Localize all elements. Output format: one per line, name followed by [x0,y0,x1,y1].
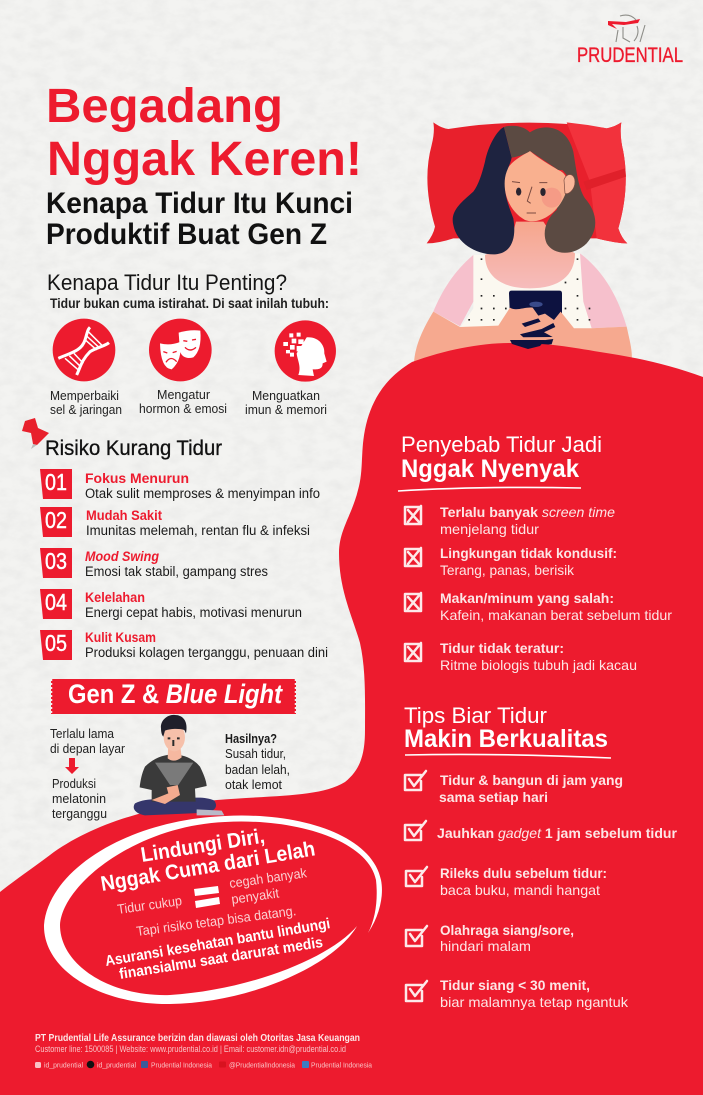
face [504,151,567,221]
hair fringe [504,126,576,170]
icon captions: sel & jaringan [50,403,122,417]
text: hasilnya: badan lelah, [225,763,290,777]
risk 04: Energi cepat habis, motivasi menurun [85,605,302,620]
heading: Risiko Kurang Tidur [45,437,222,460]
callout body: Asuransi kesehatan bantu lindungi [104,915,331,970]
icon: theatre masks [149,319,212,381]
icon captions: hormon & emosi [139,402,227,416]
phone [509,291,562,348]
tip 1: Tidur & bangun di jam yang [440,772,623,788]
icon captions: imun & memori [245,403,327,417]
risk 03: Mood Swing [85,548,159,564]
icon captions [50,388,327,417]
text: cause of melatonin disruption: Terlalu lama [50,727,114,741]
tip 4 [406,922,574,954]
cause 4: Ritme biologis tubuh jadi kacau [440,657,637,673]
text: cause of melatonin disruption: melatonin [52,792,106,806]
callout heading: Nggak Cuma dari Lelah [99,837,317,896]
footer: PT Prudential Life Assurance berizin dan diawasi oleh Otoritas Jasa Keuangan [35,1032,360,1044]
intro text: Tidur bukan cuma istirahat. Di saat inilah tubuh: [50,296,329,311]
hair left [453,127,514,254]
hair back right [530,127,595,253]
text: cause of melatonin disruption: terganggu [52,807,107,821]
neck [168,743,182,761]
ear [564,175,575,194]
eyes [168,737,180,746]
logo: Prudential [577,15,683,67]
torso [140,754,207,802]
risk 03: 03 [45,548,67,574]
title: Nggak Keren! [47,133,362,186]
icon: dna [53,319,115,381]
risk 01: Fokus Menurun [85,470,189,486]
arm and phone [152,785,180,804]
cause 2: Lingkungan tidak kondusif: [440,545,617,561]
cause 4: Tidur tidak teratur: [440,640,564,656]
risk 02: Imunitas melemah, rentan flu & infeksi [86,523,310,538]
tip 5 [406,977,629,1010]
red blanket and background shape [0,343,703,1095]
icon captions: Menguatkan [252,389,320,403]
text: hasilnya: Hasilnya? [225,732,277,746]
arrow: down [65,758,79,774]
equation: Tapi risiko tetap bisa datang. [135,903,297,939]
social links: id_prudential [44,1060,83,1070]
text: hasilnya: Susah tidur, [225,747,286,761]
screen glow [155,763,193,785]
tip 5: Tidur siang < 30 menit, [440,977,590,993]
tip 3 [406,865,607,898]
cause 3 [405,590,672,623]
cause 3: Makan/minum yang salah: [440,590,614,606]
banner: Gen Z and Blue Light: Gen Z & Blue Light [68,679,283,709]
tip 5: biar malamnya tetap ngantuk [440,994,629,1010]
socks [197,809,224,815]
text: hasilnya: otak lemot [225,778,283,792]
text: hasilnya [225,732,290,792]
sleeves [433,253,627,328]
heading: Kenapa Tidur Itu Penting? [47,270,287,295]
cause 3: Kafein, makanan berat sebelum tidur [440,607,672,623]
subtitle [46,187,353,251]
tip 2: Jauhkan gadget 1 jam sebelum tidur [437,825,678,841]
shirt dots [468,258,590,321]
title: Begadang [46,80,283,133]
social links: Prudential Indonesia [311,1060,373,1070]
face [164,723,185,751]
pillow [427,122,627,243]
section: penyebab tidur jadi nggak nyenyak [398,432,672,673]
risk 01: Otak sulit memproses & menyimpan info [85,486,320,501]
heading: Tips Biar Tidur [404,703,547,728]
tip 3: Rileks dulu sebelum tidur: [440,865,607,881]
tip 4: Olahraga siang/sore, [440,922,574,938]
risk 05: Kulit Kusam [85,629,156,645]
cause 2 [405,545,617,578]
cause 4 [405,640,637,673]
icon captions: Memperbaiki [50,389,119,403]
cause 2: Terang, panas, berisik [440,562,575,578]
equation: Tidur cukup [116,893,183,917]
heading [404,703,611,758]
footer: Customer line: 1500085 | Website: www.prudential.co.id | Email: customer.idn@prudential.co.id [35,1044,346,1054]
phone camera [529,302,543,307]
illustration: woman in bed with phone [414,122,632,363]
risk 03 [40,548,268,579]
risk 02: Mudah Sakit [86,507,162,523]
risk 04: Kelelahan [85,589,145,605]
callout heading: Lindungi Diri, [139,825,266,867]
social links: @PrudentialIndonesia [229,1060,296,1070]
risk 05: Produksi kolagen terganggu, penuaan dini [85,645,328,660]
tip 1 [405,771,623,805]
heading [398,432,602,491]
cause 1 [405,504,615,537]
finger gaps [520,318,555,346]
risk 03: Emosi tak stabil, gampang stres [85,564,268,579]
risk 05: 05 [45,630,67,656]
tip 3: baca buku, mandi hangat [440,882,600,898]
social links: id_prudential [97,1060,136,1070]
cause 1: menjelang tidur [440,521,539,537]
footer [35,1032,373,1070]
risk 01 [40,469,320,501]
equation: penyakit [230,885,280,907]
tip 1: sama setiap hari [439,789,548,805]
social links: Prudential Indonesia [151,1060,213,1070]
equation: cegah banyak [228,865,308,891]
phone bottom [510,340,545,349]
icon: head with pixels [275,320,336,382]
risk 02 [40,507,310,538]
brush ellipse [44,816,382,1004]
title [46,80,362,186]
blush [542,188,562,208]
risk 04 [40,589,302,620]
callout: lindungi diri [44,816,382,1004]
legs [134,798,216,815]
icon: red push pin [22,418,49,449]
hair [161,715,187,737]
shirt [460,253,592,328]
neck and chest [485,222,575,288]
section: risiko kurang tidur [40,437,328,660]
heading: Penyebab Tidur Jadi [401,432,602,457]
icon captions: Mengatur [157,388,210,402]
risk 02: 02 [45,507,67,533]
text: cause of melatonin disruption: Produksi [52,777,96,791]
subtitle: Kenapa Tidur Itu Kunci [46,187,353,220]
heading: Nggak Nyenyak [401,455,579,483]
risk 05 [40,629,328,660]
risk 01: 01 [45,469,67,495]
eyes, nose, mouth [512,182,547,213]
text: cause of melatonin disruption [50,727,125,821]
section: tips biar tidur makin berkualitas [404,703,678,1010]
social links [35,1060,373,1070]
illustration: boy with phone [134,715,224,815]
tip 4: hindari malam [440,938,531,954]
heading: Makin Berkualitas [404,725,608,753]
subtitle: Produktif Buat Gen Z [46,218,327,251]
cause 1: Terlalu banyak screen time [440,504,615,520]
risk 04: 04 [45,589,67,615]
arms and hands [414,308,632,363]
text: cause of melatonin disruption: di depan layar [50,742,125,756]
equation [116,865,308,939]
section: kenapa tidur itu penting [47,270,336,417]
callout body: finansialmu saat darurat medis [118,934,324,983]
